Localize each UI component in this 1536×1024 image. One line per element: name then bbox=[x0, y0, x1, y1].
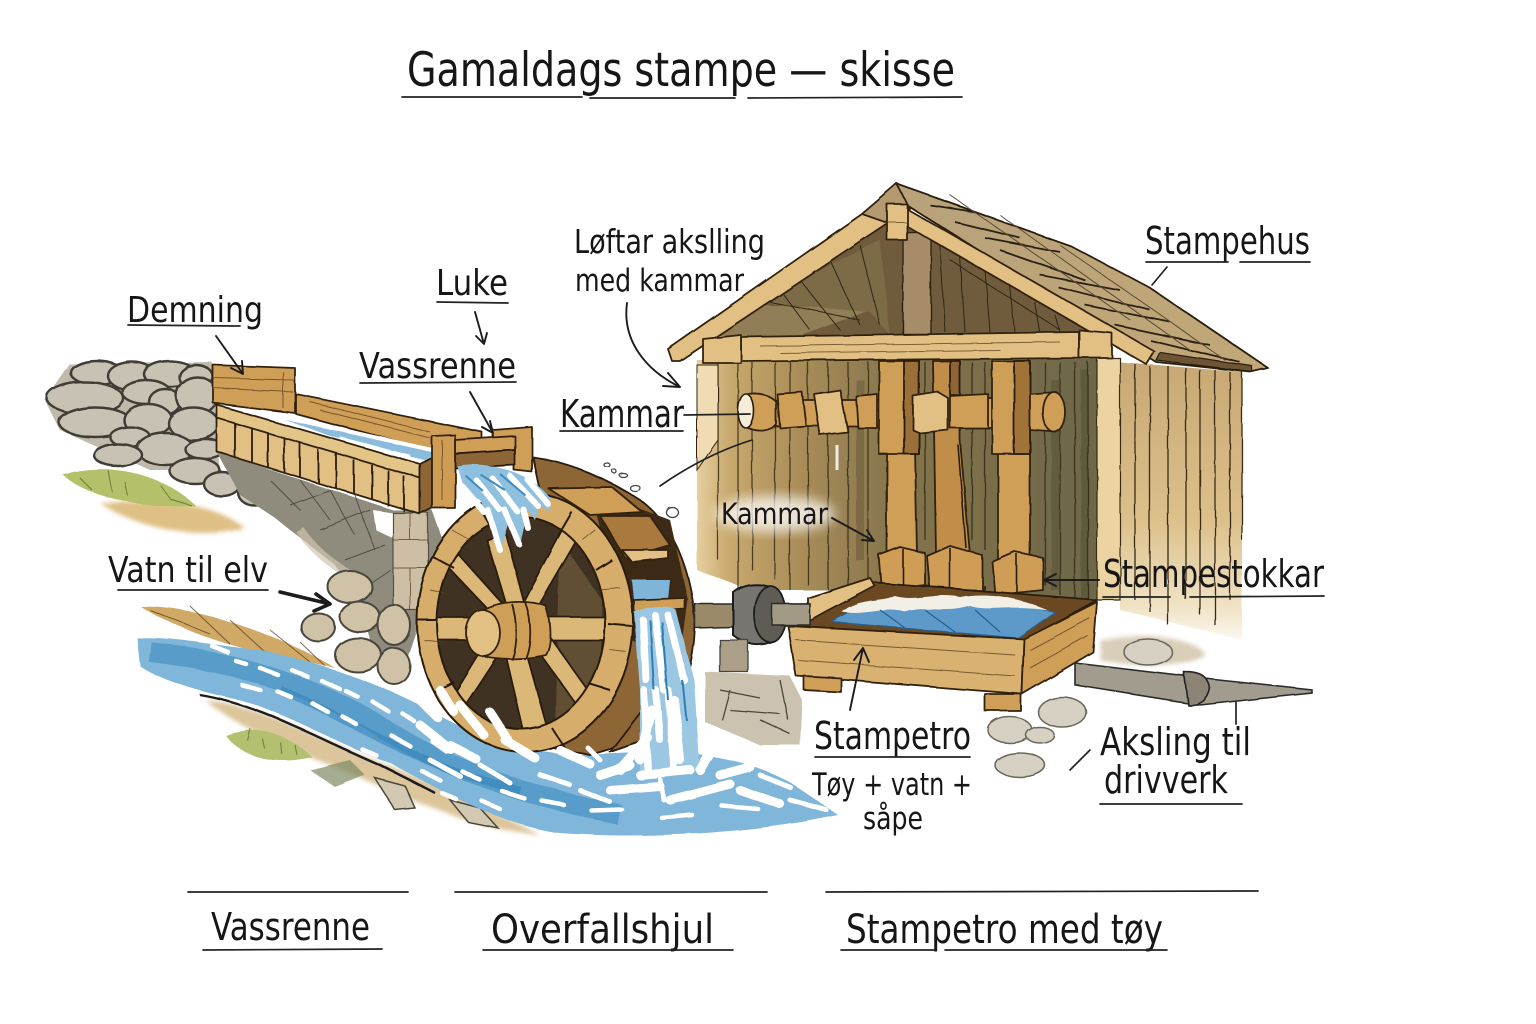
label: Kammar upper bbox=[560, 392, 752, 486]
house walls bbox=[697, 358, 1097, 610]
label: Demning: Demning bbox=[127, 290, 263, 331]
camshaft with cams bbox=[738, 390, 1050, 435]
wheel spokes dark interior bbox=[435, 515, 607, 731]
label: Stampehus bbox=[1145, 219, 1310, 285]
stamp post left bbox=[887, 448, 917, 556]
label: Vassrenne: Vassrenne bbox=[359, 346, 516, 387]
stone foundation under flume bbox=[217, 452, 450, 684]
label: Stampestokkar bbox=[1044, 552, 1324, 597]
river bbox=[137, 638, 838, 836]
label: Vatn til elv bbox=[108, 550, 330, 611]
tie beam bbox=[741, 332, 1079, 361]
wheel hub bbox=[483, 602, 550, 659]
label: Kammar lower: Kammar bbox=[721, 497, 828, 531]
label: Luke bbox=[436, 263, 508, 344]
ground washes and grass bbox=[63, 469, 540, 835]
label: Demning bbox=[127, 290, 263, 374]
foundation stones bbox=[705, 636, 1205, 777]
water falling over wheel bbox=[457, 463, 700, 775]
stone dam wall bbox=[45, 361, 272, 506]
label: Stampehus: Stampehus bbox=[1145, 219, 1310, 263]
bottom label: Stampetro med tøy: Stampetro med tøy bbox=[846, 907, 1163, 953]
label: Tøy + vatn + såpe: Tøy + vatn + bbox=[811, 767, 972, 803]
label: Stampetro: Stampetro bbox=[814, 714, 971, 758]
illustration: water mill scene bbox=[45, 184, 1312, 836]
stamp posts bbox=[877, 361, 1065, 596]
gable interior bbox=[700, 220, 1100, 336]
cams in front of posts bbox=[913, 392, 948, 433]
label: Vatn til elv: Vatn til elv bbox=[108, 550, 268, 591]
flume bbox=[213, 365, 482, 514]
sluice gate bbox=[432, 427, 532, 508]
roof shingles bbox=[897, 184, 1268, 372]
label: Stampestokkar: Stampestokkar bbox=[1103, 552, 1324, 596]
label: Kammar upper: Kammar bbox=[560, 392, 684, 436]
label: Aksling til drivverk: drivverk bbox=[1104, 758, 1228, 802]
trough with cloth bbox=[788, 578, 1097, 711]
label: Løftar aksling med kammar bbox=[574, 222, 765, 387]
wheel front rim bbox=[417, 492, 633, 752]
stamp post middle bbox=[933, 361, 970, 555]
bottom label: Overfallshjul: Overfallshjul bbox=[491, 907, 714, 953]
label: Løftar aksling med kammar: med kammar bbox=[575, 263, 744, 299]
label: Aksling til drivverk bbox=[1070, 702, 1251, 804]
label: Løftar aksling med kammar: Løftar akslling bbox=[574, 222, 765, 261]
bottom label: Vassrenne: Vassrenne bbox=[211, 905, 370, 949]
label: Aksling til drivverk: Aksling til bbox=[1100, 720, 1251, 764]
label: Tøy + vatn + såpe: såpe bbox=[863, 801, 923, 837]
label: Stampetro bbox=[814, 648, 971, 758]
splash at wheel foot bbox=[412, 690, 826, 810]
axle and hub bbox=[695, 584, 1312, 705]
label: Luke: Luke bbox=[436, 263, 508, 304]
stamp post right bbox=[998, 448, 1030, 562]
wheel back rim and buckets bbox=[533, 457, 695, 755]
text halo behind Kammar label bbox=[715, 496, 835, 532]
water wheel bbox=[417, 457, 695, 755]
stampe house bbox=[668, 184, 1268, 640]
label: Kammar lower bbox=[721, 497, 874, 541]
title: Gamaldags stampe — skisse bbox=[407, 43, 955, 98]
label: Vassrenne bbox=[359, 346, 516, 433]
roof rafters bbox=[668, 186, 907, 361]
label: Tøy + vatn + såpe bbox=[811, 767, 972, 837]
